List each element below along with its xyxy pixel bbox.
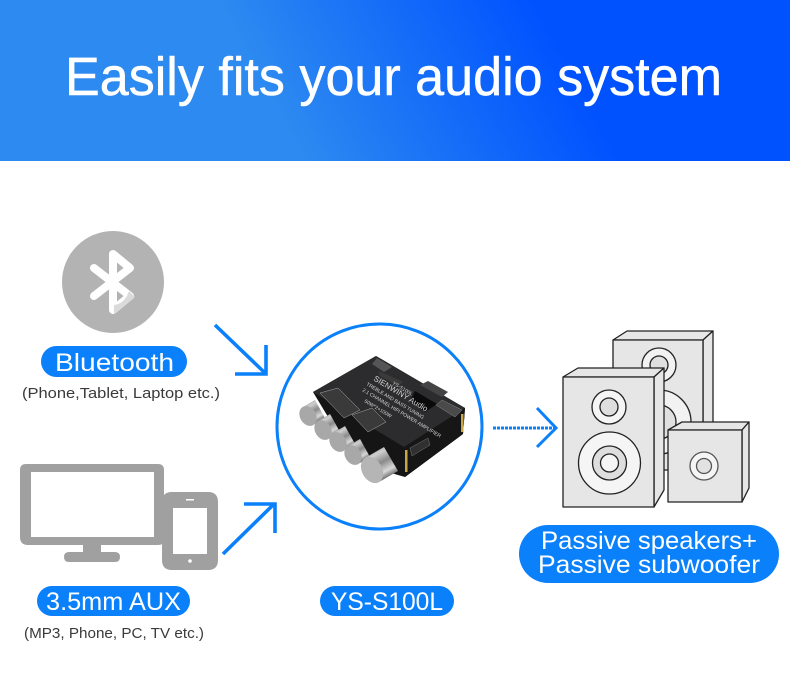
knobs xyxy=(296,400,398,487)
board printed text: 2.1 CHANNEL HIFI POWER AMPLIFIER xyxy=(361,388,442,440)
bluetooth devices caption: (Phone,Tablet, Laptop etc.) xyxy=(22,385,220,402)
aux devices caption: (MP3, Phone, PC, TV etc.) xyxy=(24,625,204,642)
subwoofer xyxy=(668,422,749,502)
panel: bluetooth source xyxy=(22,231,220,402)
board printed text: 50W*2+100W xyxy=(363,399,393,420)
icon: monitor and phone xyxy=(20,464,218,570)
icon: bluetooth xyxy=(62,231,164,333)
front speaker xyxy=(563,368,664,507)
arrow: bluetooth to amplifier xyxy=(215,325,266,374)
panel: amplifier xyxy=(277,324,482,616)
icon: speaker group xyxy=(563,331,749,507)
board printed text: SIENWINY Audio xyxy=(372,374,430,414)
model label pill: YS-S100L xyxy=(331,588,443,616)
bluetooth label pill xyxy=(41,346,187,377)
aux label pill: 3.5mm AUX xyxy=(46,588,181,616)
header banner xyxy=(0,0,790,161)
title: Easily fits your audio system xyxy=(65,47,722,107)
amplifier board xyxy=(296,356,465,487)
board printed text: TREBLE AND BASS TUNING xyxy=(365,382,425,421)
back speaker xyxy=(613,331,713,470)
bluetooth label pill: Bluetooth xyxy=(55,349,174,377)
speakers label pill xyxy=(519,525,779,583)
panel: speakers xyxy=(519,331,779,583)
amplifier circle outline xyxy=(277,324,482,529)
arrow: aux to amplifier xyxy=(223,504,275,554)
arrow: amplifier to speakers xyxy=(493,408,556,447)
speakers label pill: Passive speakers+ xyxy=(541,527,757,555)
speakers label pill: Passive subwoofer xyxy=(538,551,760,579)
board printed text: YS-S100L xyxy=(391,381,414,398)
panel: aux source xyxy=(20,464,218,642)
